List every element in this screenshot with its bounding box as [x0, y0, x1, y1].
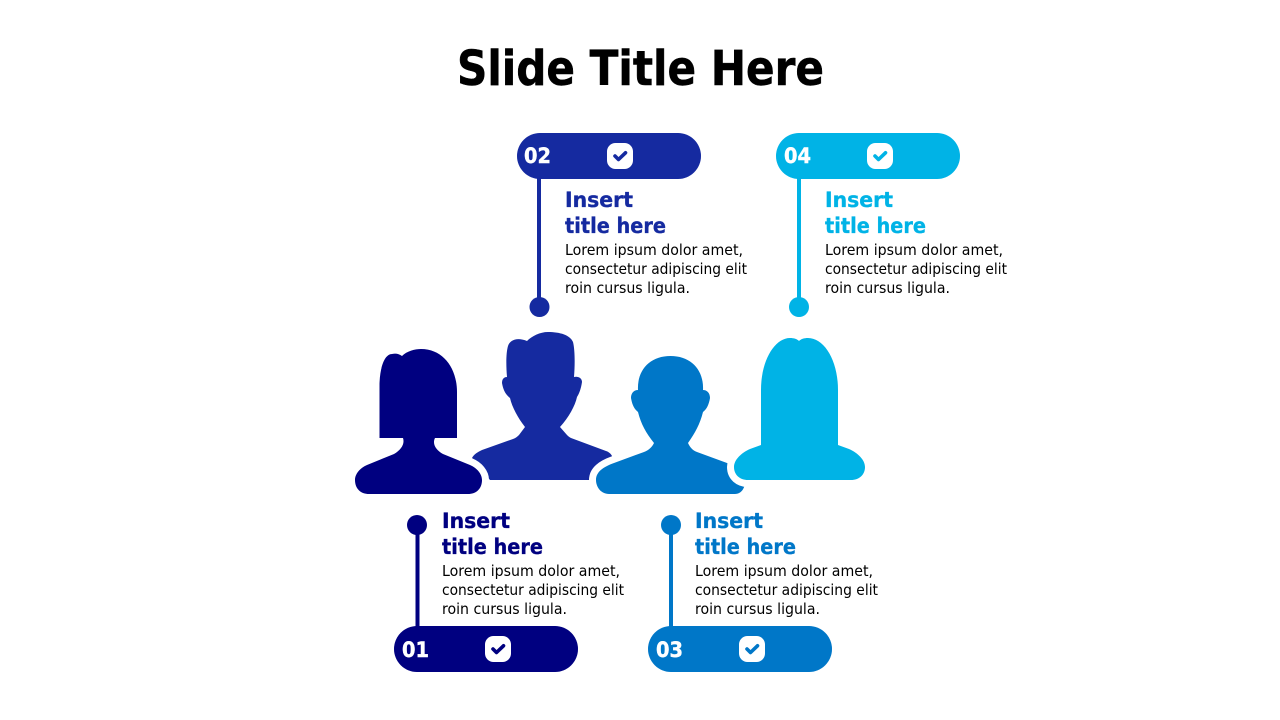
callout 04 [776, 133, 1008, 317]
body text 04: consectetur adipiscing elit [825, 260, 1008, 278]
connector line 03 [669, 527, 673, 635]
pill 03 [648, 626, 832, 672]
dot 01 [407, 515, 427, 535]
body text 03: Lorem ipsum dolor amet, [695, 562, 873, 580]
callout 03 [648, 509, 879, 672]
body text 03: consectetur adipiscing elit [695, 581, 879, 599]
connector line 02 [537, 170, 541, 305]
heading 04: Insert [825, 188, 893, 213]
icon: check badge 02 [607, 143, 633, 169]
body text 04: Lorem ipsum dolor amet, [825, 241, 1003, 259]
icon: person 03 short hair [596, 356, 745, 494]
pill 01 [394, 626, 578, 672]
body text 01 [442, 562, 625, 618]
heading 02: title here [565, 214, 666, 239]
icon: check badge 01 [485, 636, 511, 662]
icon: check badge 03 [739, 636, 765, 662]
body text 04 [825, 241, 1008, 297]
body text 02: consectetur adipiscing elit [565, 260, 748, 278]
dot 02 [530, 297, 550, 317]
title: Slide Title Here [457, 41, 824, 97]
number 03: 03 [656, 638, 683, 663]
icon: person 01 woman with bob hair [355, 349, 482, 494]
icon: person 04 long hair [734, 338, 865, 480]
heading 03: title here [695, 535, 796, 560]
callout 01 [394, 509, 625, 672]
callout 02 [517, 133, 748, 317]
connector line 01 [416, 527, 420, 635]
heading 02: Insert [565, 188, 633, 213]
heading 03: Insert [695, 509, 763, 534]
body text 02: Lorem ipsum dolor amet, [565, 241, 743, 259]
body text 01: consectetur adipiscing elit [442, 581, 625, 599]
heading 02 [565, 188, 666, 239]
icon: person 02 man with hair [472, 332, 612, 480]
number 01: 01 [402, 638, 429, 663]
body text 03 [695, 562, 879, 618]
heading 01: title here [442, 535, 543, 560]
body text 01: roin cursus ligula. [442, 600, 567, 618]
dot 04 [789, 297, 809, 317]
body text 02: roin cursus ligula. [565, 279, 690, 297]
heading 03 [695, 509, 796, 560]
number 02: 02 [524, 144, 551, 169]
body text 04: roin cursus ligula. [825, 279, 950, 297]
connector line 04 [797, 170, 801, 305]
number 04: 04 [784, 144, 811, 169]
heading 04: title here [825, 214, 926, 239]
dot 03 [661, 515, 681, 535]
body text 02 [565, 241, 748, 297]
icon: check badge 04 [867, 143, 893, 169]
pill 04 [776, 133, 960, 179]
pill 02 [517, 133, 701, 179]
heading 04 [825, 188, 926, 239]
heading 01: Insert [442, 509, 510, 534]
heading 01 [442, 509, 543, 560]
figure: four people silhouettes [355, 332, 865, 494]
body text 01: Lorem ipsum dolor amet, [442, 562, 620, 580]
body text 03: roin cursus ligula. [695, 600, 820, 618]
